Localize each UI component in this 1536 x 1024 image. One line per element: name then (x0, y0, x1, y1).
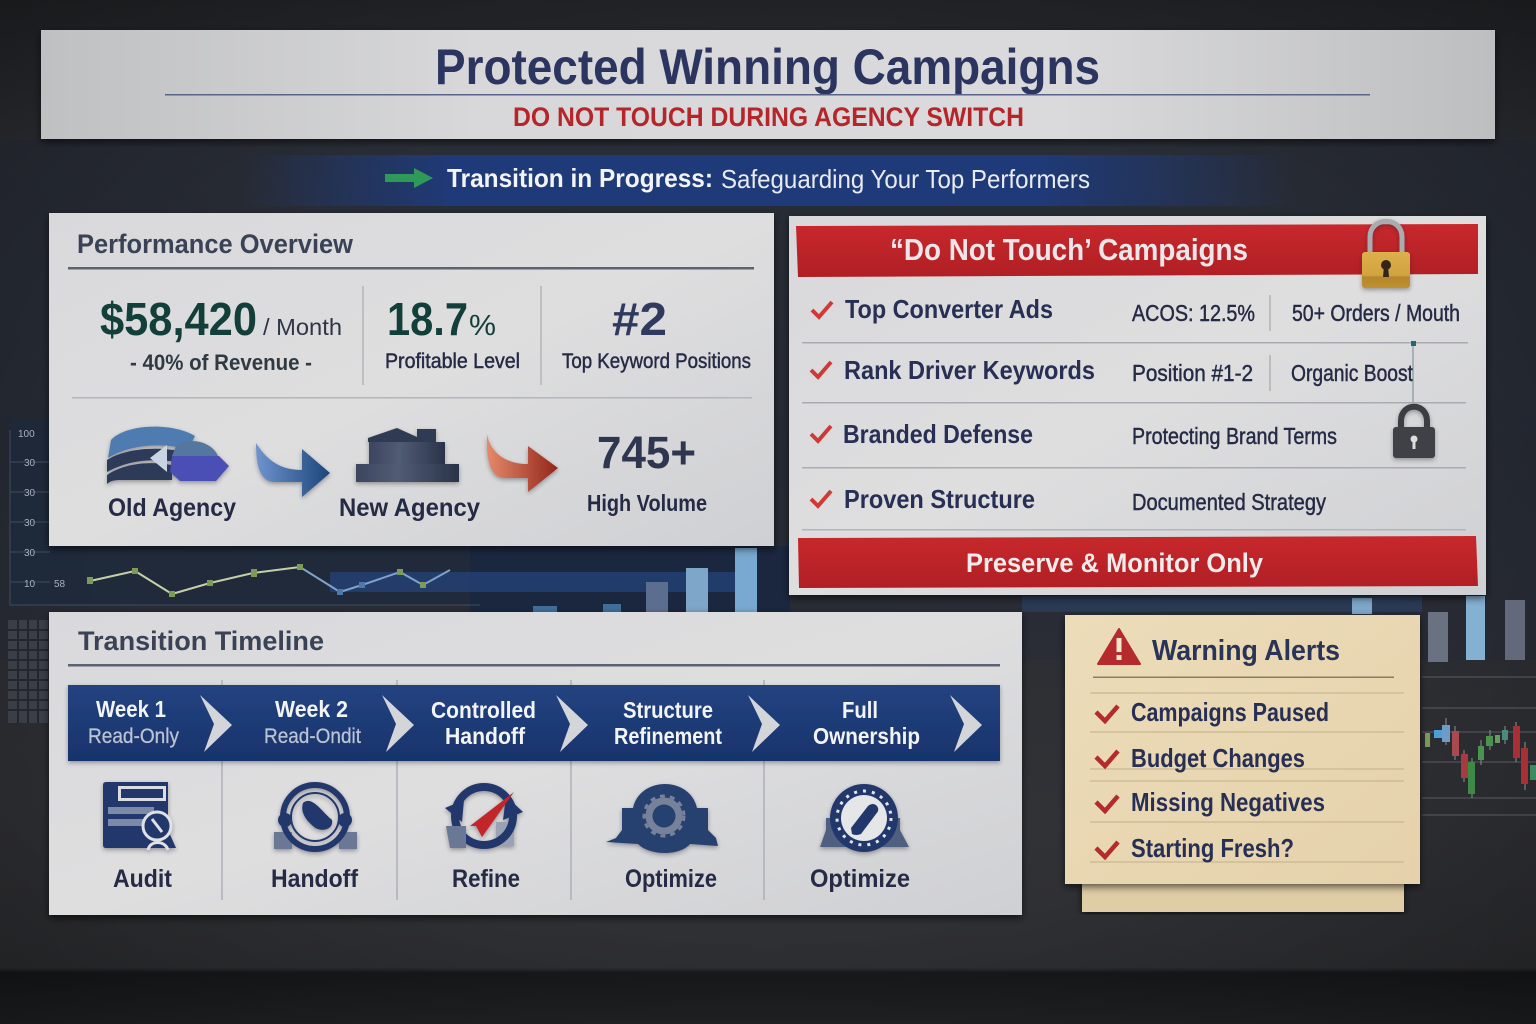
heading: warning alerts: Warning Alerts (1152, 635, 1340, 667)
label: handoff: Handoff (271, 865, 359, 893)
background chart: left axis and line chart: 30 (24, 518, 36, 529)
step 5 label: Ownership (813, 723, 920, 749)
row: branded defense: Branded Defense (843, 419, 1033, 449)
background chart: left axis and line chart: 10 (24, 579, 36, 590)
background chart: left axis and line chart: 30 (24, 548, 36, 559)
step 2 label: Week 2 (275, 696, 348, 722)
row: top converter ads: 50+ Orders / Mouth (1292, 300, 1460, 326)
step 5 label (813, 697, 920, 749)
background bars: centre (533, 548, 757, 612)
label: old agency: Old Agency (108, 494, 236, 522)
row: top converter ads: ACOS: 12.5% (1132, 300, 1255, 326)
metric: profitable level: 18.7 (387, 293, 468, 345)
metric: profitable level: Profitable Level (385, 350, 520, 373)
heading: transition timeline: Transition Timeline (78, 626, 324, 656)
label: refine: Refine (452, 865, 520, 893)
row: proven structure: Documented Strategy (1132, 489, 1326, 515)
background chart: left axis and line chart (10, 420, 790, 612)
timeline bar (68, 685, 1000, 761)
alert: starting fresh: Starting Fresh? (1131, 833, 1294, 863)
alert: missing negatives: Missing Negatives (1131, 787, 1325, 817)
background chart: left axis and line chart: 58 (54, 579, 66, 590)
background: data grid block left (8, 620, 48, 723)
metric: monthly revenue (100, 293, 342, 375)
footer text: Preserve & Monitor Only (966, 548, 1263, 578)
background chart: left axis and line chart: 100 (18, 429, 35, 440)
metric: high volume (587, 427, 707, 516)
title panel (41, 30, 1495, 139)
row: top converter ads: Top Converter Ads (845, 294, 1053, 324)
row: rank driver keywords (811, 355, 1414, 391)
background bars: right (1022, 596, 1536, 815)
row: proven structure (811, 484, 1326, 515)
step 1 label: Week 1 (96, 696, 166, 722)
icon: optimize gear (606, 784, 718, 853)
subtitle: DO NOT TOUCH DURING AGENCY SWITCH (513, 102, 1024, 132)
label: optimize 1: Optimize (625, 865, 717, 893)
transition banner: Safeguarding Your Top Performers (721, 164, 1090, 194)
icon: handoff (274, 785, 357, 849)
icon: optimize dial (820, 784, 909, 852)
banner text: Transition in Progress: (447, 163, 713, 193)
step 1 label: Read-Only (88, 725, 179, 748)
metric: monthly revenue: / Month (263, 314, 342, 340)
icon: new agency (356, 428, 459, 482)
step 2 label (264, 696, 361, 748)
icon: green arrow (385, 168, 433, 188)
chevrons (200, 695, 982, 752)
metric: high volume: 745+ (597, 427, 696, 478)
metric: high volume: High Volume (587, 490, 707, 516)
panel: warning alerts (1065, 615, 1420, 912)
icon: old agency (107, 427, 229, 484)
row: rank driver keywords: Rank Driver Keywords (844, 355, 1095, 385)
background chart: left axis and line chart: 30 (24, 458, 36, 469)
step 4 label: Refinement (614, 723, 722, 749)
row: top converter ads (812, 294, 1460, 331)
arrow: blue (256, 443, 330, 497)
step 4 label (614, 697, 722, 749)
title: Protected Winning Campaigns (435, 39, 1100, 95)
row: rank driver keywords: Position #1-2 (1132, 360, 1253, 386)
red footer (798, 536, 1478, 588)
label: optimize 2: Optimize (810, 865, 910, 893)
step 1 label (88, 696, 179, 748)
metric: keyword positions: Top Keyword Positions (562, 350, 751, 373)
step 2 label: Read-Ondit (264, 725, 361, 748)
heading: performance overview: Performance Overview (77, 229, 354, 259)
row: proven structure: Proven Structure (844, 484, 1035, 514)
row: rank driver keywords: Organic Boost (1291, 360, 1414, 386)
icon: dark padlock (1393, 407, 1435, 458)
label: new agency: New Agency (339, 494, 480, 522)
metric: monthly revenue: - 40% of Revenue - (130, 350, 312, 375)
under sheet (1082, 880, 1404, 912)
icon: refine (445, 787, 523, 848)
alert: campaigns paused: Campaigns Paused (1131, 697, 1329, 727)
arrow: red (487, 434, 558, 492)
background chart: left axis and line chart: 30 (24, 488, 36, 499)
row: branded defense (811, 419, 1337, 449)
step 3 label (431, 697, 536, 749)
transition banner (240, 155, 1300, 206)
metric: keyword positions: #2 (612, 293, 667, 345)
red header (796, 224, 1478, 277)
background: candlestick chart (1425, 718, 1536, 798)
step 3 label: Controlled (431, 697, 536, 723)
alert: budget changes: Budget Changes (1131, 743, 1305, 773)
note sheet (1065, 615, 1420, 884)
icon: audit (103, 782, 176, 850)
panel: transition timeline (49, 612, 1022, 915)
metric: monthly revenue: $58,420 (100, 293, 257, 345)
metric: profitable level: % (469, 310, 496, 342)
metric: keyword positions (562, 293, 751, 373)
heading: do not touch: “Do Not Touch’ Campaigns (890, 232, 1248, 267)
step 3 label: Handoff (445, 723, 525, 749)
panel: do not touch campaigns (789, 216, 1486, 595)
step 4 label: Structure (623, 697, 713, 723)
row: branded defense: Protecting Brand Terms (1132, 423, 1337, 449)
panel: performance overview (49, 213, 774, 546)
metric: profitable level (385, 293, 520, 373)
step 5 label: Full (842, 697, 878, 723)
label: audit: Audit (113, 865, 173, 893)
icon: warning triangle (1098, 629, 1140, 664)
icon: gold padlock (1362, 221, 1410, 288)
